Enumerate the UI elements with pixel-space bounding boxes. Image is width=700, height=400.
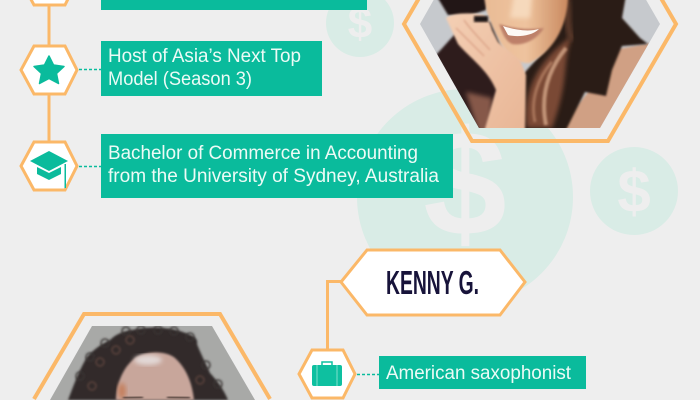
dashed connector to education box (79, 166, 101, 168)
timeline connector: first profile (48, 0, 50, 150)
text box: education: Bachelor of Commerce in Accounting (108, 143, 418, 164)
face (116, 352, 194, 400)
hair top left (436, 0, 490, 16)
decorative dollar coins: $ (348, 0, 372, 48)
decorative dollar coins (326, 0, 678, 305)
dashed connector to host box (79, 68, 101, 70)
node: star icon (21, 46, 77, 94)
text box: education: from the University of Sydney, Australia (108, 166, 439, 187)
brown highlights (526, 36, 572, 128)
hand (446, 13, 526, 132)
text box: American saxophonist: American saxophonist (386, 363, 572, 384)
title pill: Kenny G.: KENNY G. (386, 264, 479, 301)
mouth (499, 24, 544, 44)
decorative dollar coins: $ (423, 99, 507, 267)
face (484, 0, 568, 63)
top text box cropped (101, 0, 367, 10)
text box: education (101, 134, 453, 198)
portrait: Kenny G. in hexagon (34, 314, 270, 400)
title pill: Kenny G. (341, 250, 525, 315)
curls (76, 326, 222, 388)
portrait: woman in hexagon (404, 0, 676, 141)
shoulder skin (566, 42, 650, 128)
hair left (436, 34, 500, 132)
hair left of face wisp (488, 20, 502, 46)
decorative dollar coins: $ (617, 158, 651, 225)
text box: host: Model (Season 3) (108, 69, 252, 90)
text box: American saxophonist (379, 356, 586, 389)
node: graduation cap icon (21, 142, 77, 190)
dashed connector to saxophonist box (357, 374, 379, 376)
hexagon frame open at bottom edge (34, 314, 270, 399)
text box: host: Host of Asia’s Next Top (108, 46, 301, 67)
hair right (518, 0, 648, 132)
brows (123, 397, 190, 398)
text box: host (101, 41, 322, 96)
node: briefcase icon (299, 350, 355, 398)
hexagon node cropped at top (21, 0, 77, 5)
curly hair (68, 328, 228, 400)
connector from title to node (328, 282, 341, 350)
